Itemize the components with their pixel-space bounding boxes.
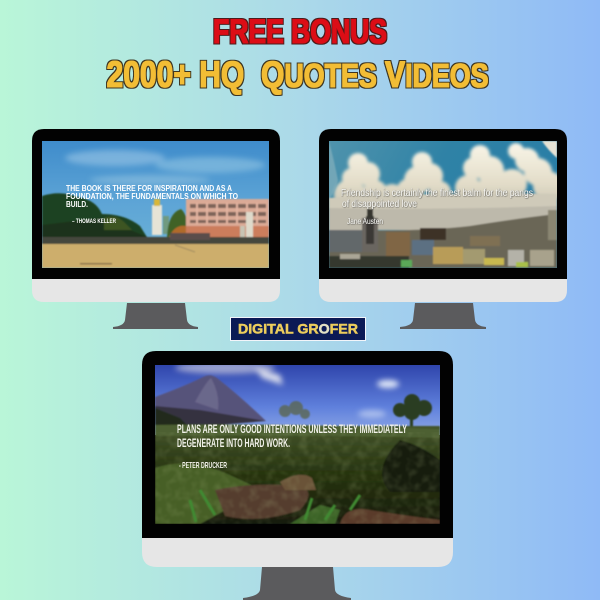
monitor: bottom, Peter Drucker quote <box>142 351 453 600</box>
monitor stand left <box>113 303 198 329</box>
subtitle: 2000+ HQ Quotes Videos: 2000+ HQ QUOTES VIDEOS <box>106 54 489 95</box>
screen: volcano landscape photo <box>155 362 440 524</box>
quote text right: Jane Austen <box>347 216 383 226</box>
monitor bezel left <box>32 129 280 302</box>
monitor stand right <box>400 303 486 329</box>
monitor: left, Thomas Keller quote <box>32 129 280 329</box>
quote text left: THE BOOK IS THERE FOR INSPIRATION AND AS A <box>66 184 232 193</box>
screen: clouds over city photo <box>329 141 563 268</box>
quote text right: Friendship is certainly the finest balm for the pangs <box>341 188 533 199</box>
quote text bottom: - PETER DRUCKER <box>179 460 227 470</box>
quote text left: FOUNDATION, THE FUNDAMENTALS ON WHICH TO <box>66 192 238 201</box>
quote text right: of disappointed love <box>342 199 417 210</box>
grass speckle <box>155 432 440 524</box>
monitor stand bottom <box>243 567 351 600</box>
monitor bezel bottom <box>142 351 453 567</box>
quote text bottom: DEGENERATE INTO HARD WORK. <box>177 436 290 450</box>
quote text right <box>341 188 533 226</box>
monitor: right, Jane Austen quote <box>319 129 567 329</box>
logo: Digital Grofer <box>230 318 366 340</box>
monitor bezel right <box>319 129 567 302</box>
quote text bottom: PLANS ARE ONLY GOOD INTENTIONS UNLESS THEY IMMEDIATELY <box>177 422 407 436</box>
logo: Digital Grofer: DIGITAL GROFER <box>238 320 358 336</box>
quote text bottom <box>177 422 407 470</box>
quote text left: BUILD. <box>66 200 88 209</box>
clouds <box>332 141 557 200</box>
screen: city square photo <box>42 141 269 268</box>
quote text left: – THOMAS KELLER <box>72 218 116 225</box>
skyline <box>329 214 557 268</box>
title: free bonus: FREE BONUS <box>213 13 387 51</box>
quote text left <box>66 184 238 225</box>
